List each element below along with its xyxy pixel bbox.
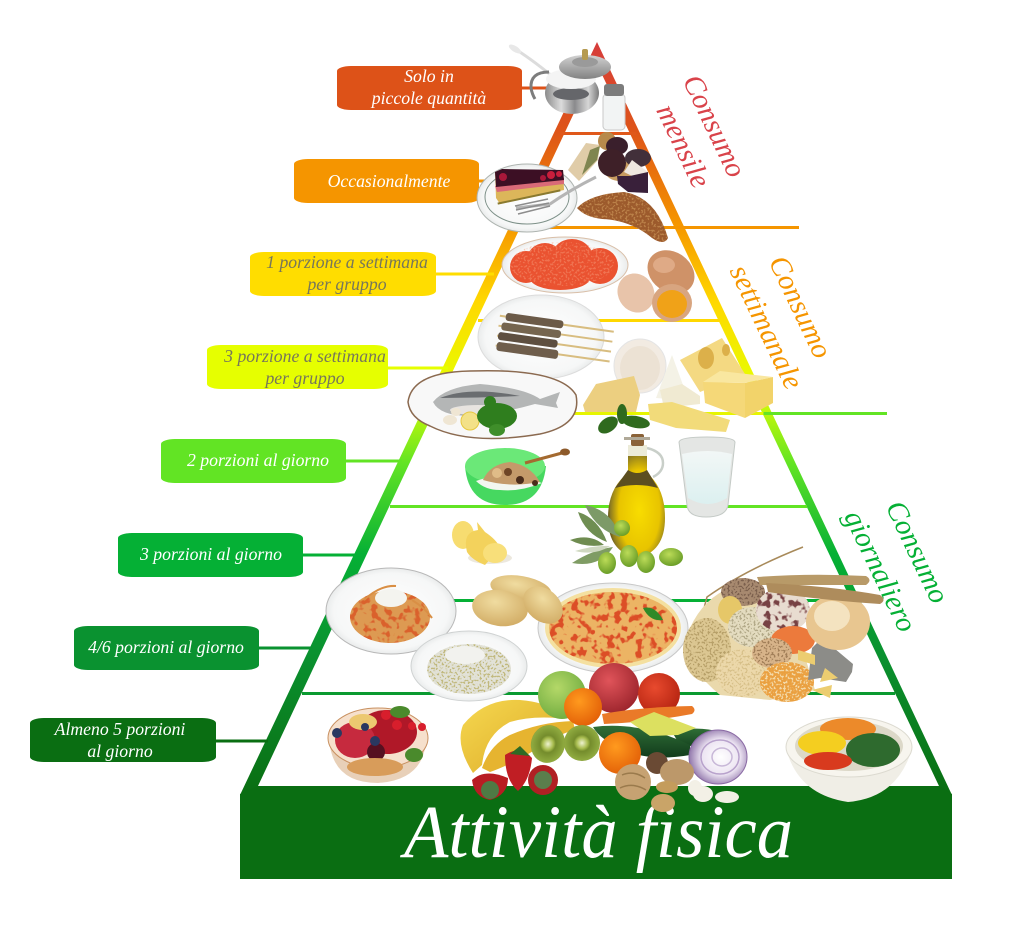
icon: glass of milk	[679, 437, 735, 517]
icon: tomato	[638, 673, 680, 715]
title: Attività fisica	[399, 791, 793, 874]
label: 1 porzione a settimana: per gruppo	[305, 274, 387, 294]
icon: muesli bowl	[465, 448, 570, 505]
tier divider lines	[302, 132, 895, 695]
label: occasionalmente	[294, 159, 507, 203]
icon: berry bowl	[328, 706, 428, 783]
icon: cheeses	[583, 338, 773, 432]
label: 2 porzioni al giorno: 2 porzioni al giorno	[187, 450, 329, 470]
label: 2 porzioni al giorno	[161, 439, 402, 483]
label: 3 porzioni al giorno: 3 porzioni al giorno	[139, 544, 282, 564]
label: almeno 5 porzioni: al giorno	[87, 741, 153, 761]
icon: salami plate	[502, 237, 628, 293]
side label: consumo mensile: mensile	[650, 99, 717, 193]
icon: garlic	[688, 780, 739, 803]
label: 4/6 porzioni al giorno	[74, 626, 313, 670]
label: occasionalmente: Occasionalmente	[328, 171, 451, 191]
label: 3 porzione a settimana: per gruppo	[263, 368, 345, 388]
side label: consumo giornaliero	[837, 496, 955, 637]
icon: potatoes	[470, 571, 570, 631]
label: almeno 5 porzioni: Almeno 5 porzioni	[54, 719, 185, 739]
icon: salt shaker	[603, 84, 625, 130]
icon: pastries	[568, 132, 651, 193]
icon: basil	[595, 404, 651, 437]
icon: mandarin	[599, 732, 641, 774]
icon: kiwi	[527, 721, 600, 767]
icon: orange	[564, 688, 602, 726]
icon: green apple	[538, 671, 586, 719]
icon: strawberries	[472, 746, 558, 800]
label: 3 porzioni al giorno	[118, 533, 357, 577]
icon: red apple	[589, 663, 639, 713]
side label: consumo mensile: Consumo	[676, 70, 752, 182]
icon: olives and leaves	[570, 505, 683, 574]
icon: sugar bowl	[507, 43, 611, 114]
label: 3 porzione a settimana	[207, 345, 448, 389]
icon: salad bowl	[786, 717, 912, 802]
icon: cereals and legumes	[683, 547, 884, 702]
side label: consumo mensile	[650, 70, 752, 193]
base band	[240, 786, 952, 879]
icon: pizza	[538, 583, 688, 673]
icon: spaghetti plate	[326, 568, 456, 654]
icon: cake on plate	[477, 164, 596, 232]
icon: butter curls	[452, 521, 512, 565]
icon: rice bowl	[411, 631, 527, 701]
label: 1 porzione a settimana	[250, 252, 494, 296]
label: solo in piccole quantità: Solo in	[404, 66, 454, 86]
icon: skewers plate	[478, 295, 614, 379]
side label: consumo giornaliero: giornaliero	[837, 505, 923, 637]
label: 4/6 porzioni al giorno: 4/6 porzioni al giorno	[88, 637, 244, 657]
side label: consumo settimanale: settimanale	[723, 260, 809, 394]
label: 1 porzione a settimana: 1 porzione a settimana	[266, 252, 428, 272]
pyramid frame	[240, 42, 952, 795]
icon: onion	[689, 730, 747, 784]
icon: eggs	[610, 241, 703, 322]
icon: olive oil bottle	[608, 434, 665, 558]
icon: fish plate	[408, 371, 577, 438]
icon: walnuts	[615, 752, 694, 812]
label: solo in piccole quantità	[337, 66, 552, 110]
side label: consumo giornaliero: Consumo	[879, 496, 955, 608]
icon: carrot	[602, 706, 694, 724]
label: almeno 5 porzioni	[30, 718, 268, 762]
icon: croissant	[577, 192, 668, 242]
label: solo in piccole quantità: piccole quantità	[370, 88, 486, 108]
side label: consumo settimanale: Consumo	[762, 251, 838, 363]
icon: bananas	[461, 700, 575, 773]
icon: zucchini and celery	[593, 712, 742, 758]
label: 3 porzione a settimana: 3 porzione a settimana	[223, 346, 386, 366]
